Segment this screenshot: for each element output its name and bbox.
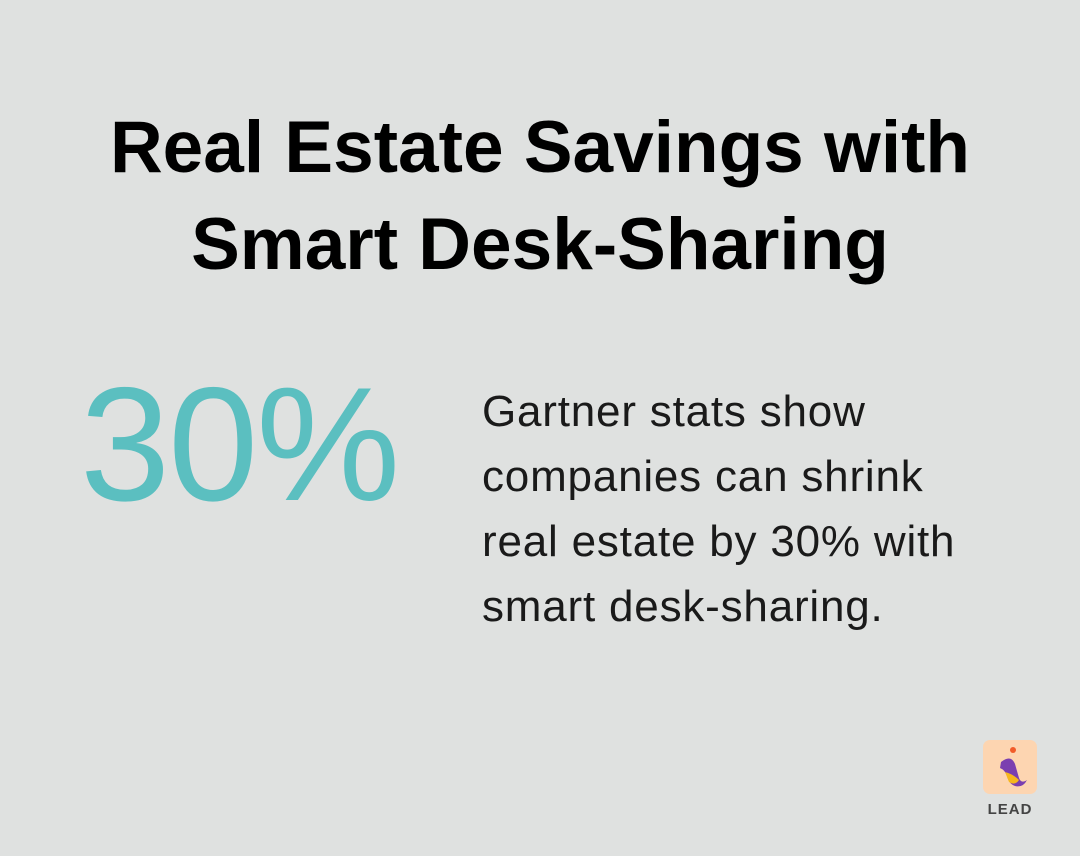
big stat: 30% (80, 354, 398, 535)
description text: companies can shrink (482, 452, 924, 501)
logo (983, 740, 1037, 818)
icon: logo mark (983, 740, 1037, 794)
logo text: LEAD (988, 801, 1032, 818)
description text (482, 387, 955, 631)
description text: real estate by 30% with (482, 517, 955, 566)
title (110, 107, 970, 285)
title: Smart Desk-Sharing (191, 204, 889, 285)
title: Real Estate Savings with (110, 107, 970, 188)
description text: Gartner stats show (482, 387, 866, 436)
description text: smart desk-sharing. (482, 582, 884, 631)
